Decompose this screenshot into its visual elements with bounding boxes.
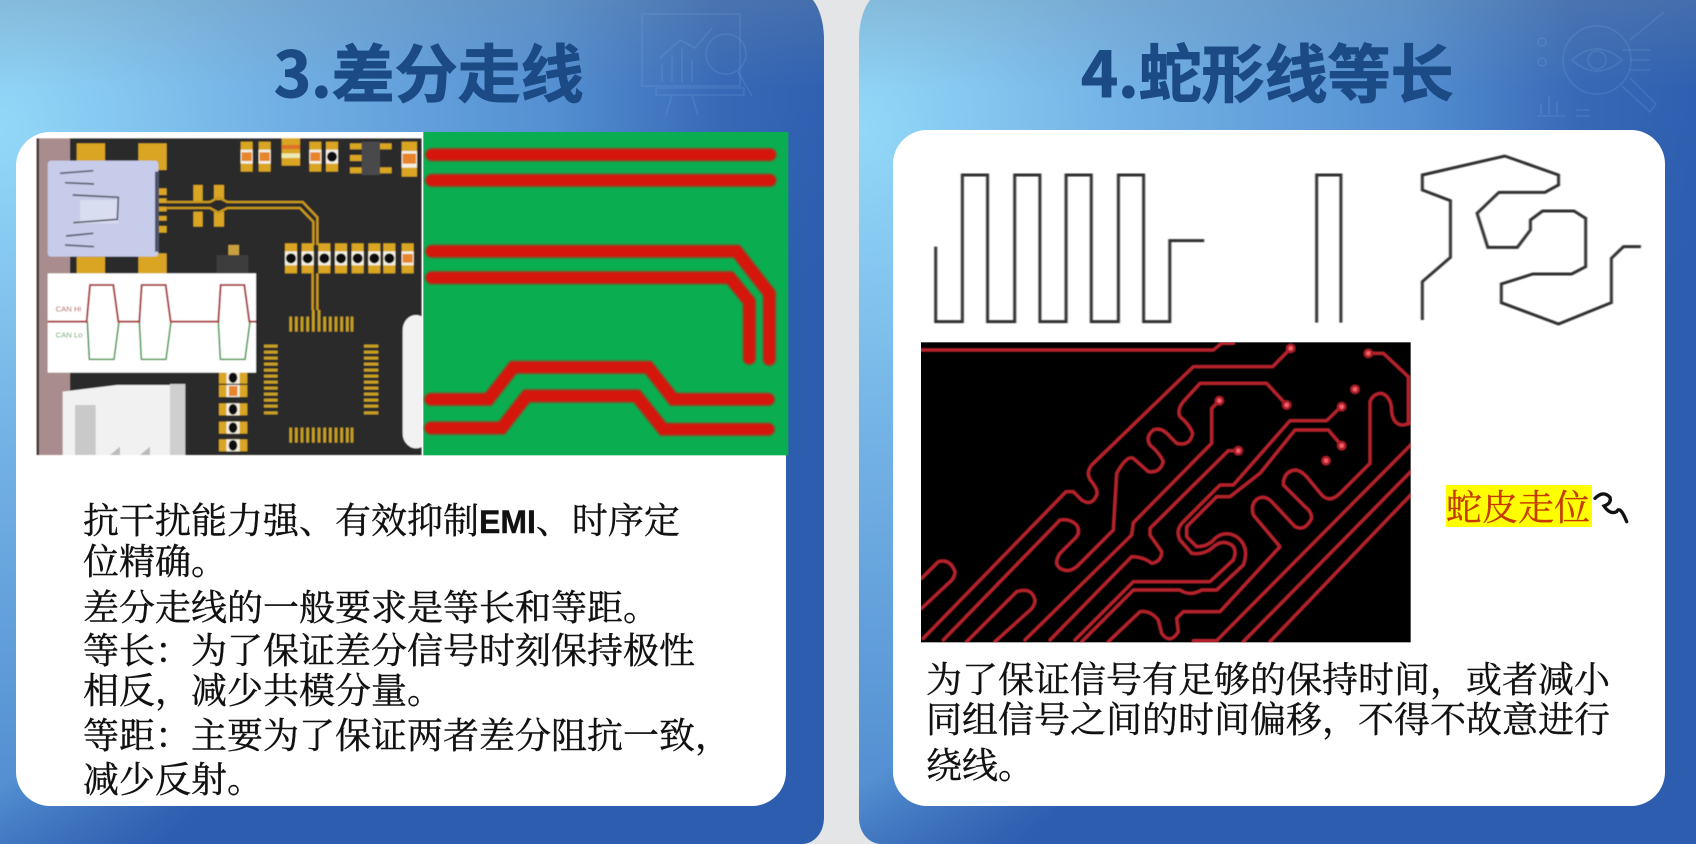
icon: presentation board watermark	[642, 14, 752, 115]
trace: irregular 45-degree serpentine	[1422, 156, 1641, 324]
image: black PCB layout with red serpentine traces	[921, 342, 1411, 642]
text block: differential routing description: 差分走线的一般要求是等长和等距。	[83, 580, 659, 631]
text block: differential routing description: 减少反射。	[83, 752, 263, 803]
text block: serpentine description	[926, 652, 1610, 789]
trace: single hairpin	[1317, 175, 1341, 323]
heading: 3 differential routing: 3.差分走线	[274, 25, 584, 116]
text block: differential routing description	[83, 493, 731, 803]
panel: serpentine length matching	[859, 0, 1696, 844]
chart: CAN Hi / CAN Lo signal waveform: CAN Hi	[56, 304, 81, 313]
callout: highlighted snake-skin routing label: 蛇皮走位	[1446, 480, 1590, 531]
text block: serpentine description: 同组信号之间的时间偏移，不得不故意进行	[926, 692, 1610, 743]
text block: differential routing description: 位精确。	[83, 534, 227, 585]
trace: rectangular serpentine	[936, 175, 1204, 322]
text block: differential routing description: 抗干扰能力强、有效抑制EMI、时序定	[83, 493, 680, 544]
icon: eye magnifier watermark	[1537, 12, 1664, 116]
text block: serpentine description: 为了保证信号有足够的保持时间，或者减小	[926, 652, 1610, 703]
text block: serpentine description: 绕线。	[926, 738, 1034, 789]
card: serpentine content	[893, 130, 1665, 806]
image: PCB with differential USB traces	[36, 138, 422, 456]
chart: CAN Hi / CAN Lo signal waveform	[48, 273, 256, 373]
text block: differential routing description: 等长：为了保证差分信号时刻保持极性	[83, 623, 695, 674]
panel: differential routing	[0, 0, 824, 844]
card: differential content	[16, 132, 786, 806]
heading: 4 serpentine: 4.蛇形线等长	[1081, 25, 1454, 116]
text block: differential routing description: 相反，减少共模分量。	[83, 663, 443, 714]
text block: differential routing description: 等距：主要为了保证两者差分阻抗一致，	[83, 708, 731, 759]
chart: CAN Hi / CAN Lo signal waveform: CAN Lo	[56, 331, 82, 340]
